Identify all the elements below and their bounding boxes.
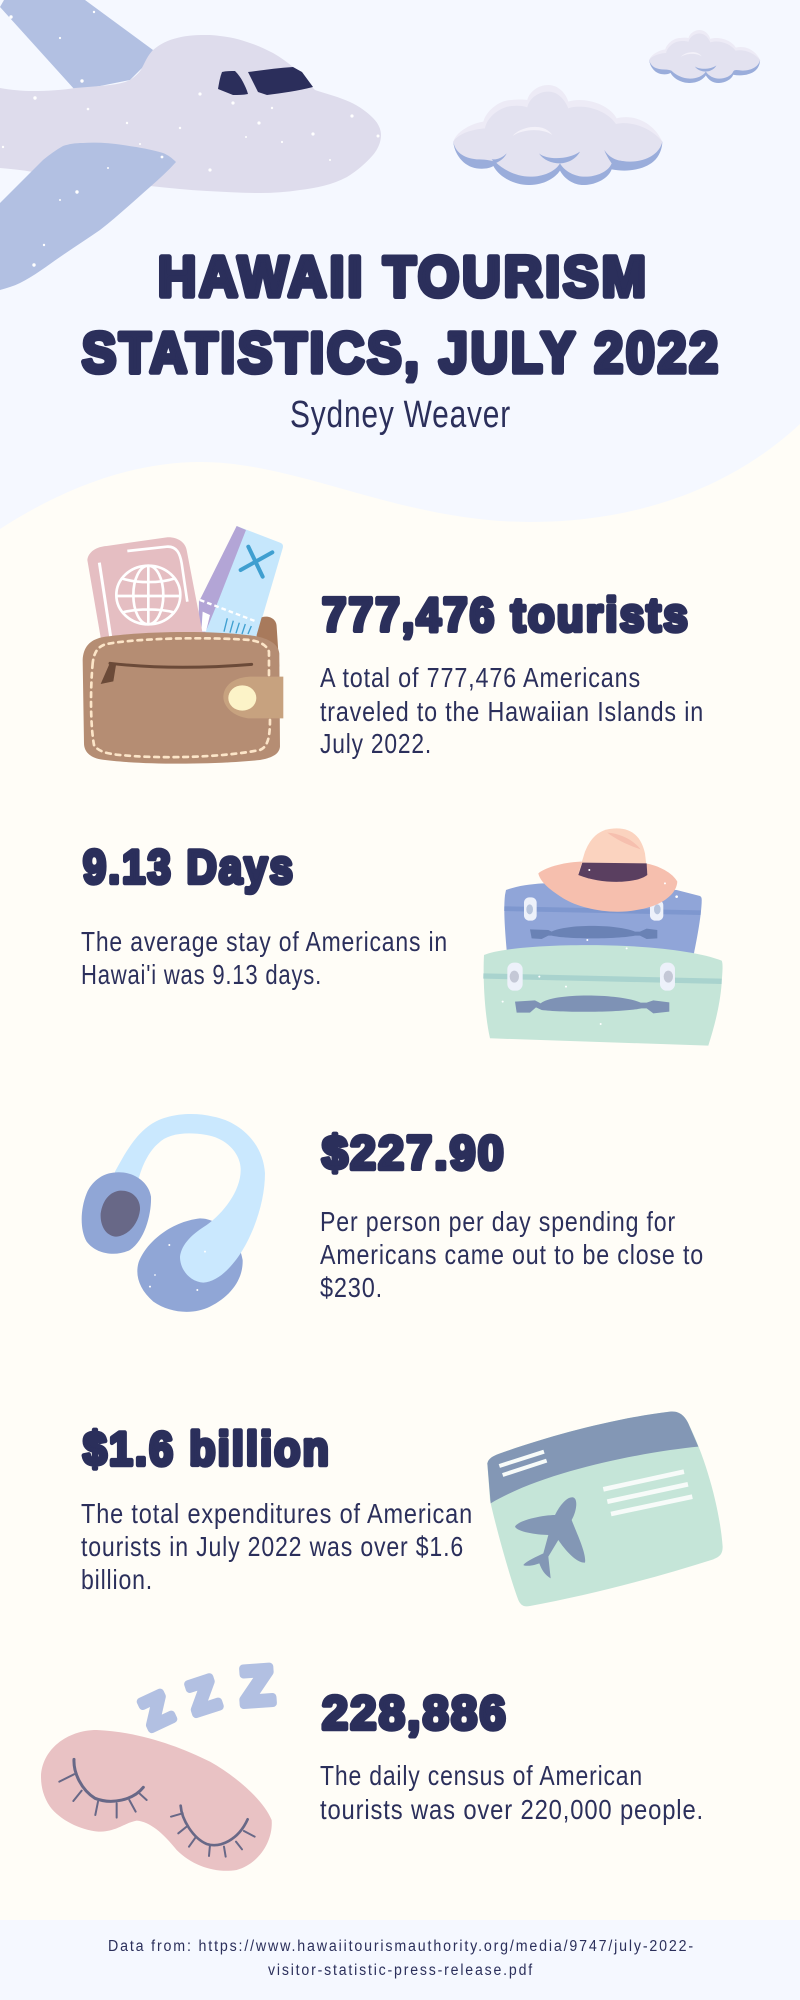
background: cream wave [0, 424, 800, 2000]
footer source text [108, 1938, 695, 1979]
text block: traveled to the Hawaiian Islands in [320, 696, 704, 727]
panel: tourists [83, 526, 704, 764]
icon: wallet with passport and ticket [83, 526, 283, 764]
text block: Americans came out to be close to [320, 1239, 704, 1270]
title [82, 245, 721, 385]
subtitle: author: Sydney Weaver [290, 394, 511, 436]
heading: 228,886 [322, 1686, 508, 1739]
heading: 777,476 tourists [322, 588, 690, 641]
text block: The total expenditures of American [81, 1498, 473, 1529]
text block: tourists was over 220,000 people. [320, 1794, 704, 1825]
text block: The daily census of American [320, 1760, 643, 1791]
icon: boarding pass [487, 1412, 723, 1606]
text block: Per person per day spending for [320, 1206, 676, 1237]
text block: tourists in July 2022 was over $1.6 [81, 1531, 464, 1562]
footer source text: visitor-statistic-press-release.pdf [268, 1962, 534, 1979]
title: STATISTICS, JULY 2022 [82, 321, 721, 385]
icon: zzz letters [135, 1656, 275, 1739]
footer source text: Data from: https://www.hawaiitourismauthority.org/media/9747/july-2022- [108, 1938, 695, 1955]
text block [81, 926, 448, 990]
text block: Hawai'i was 9.13 days. [81, 959, 322, 990]
icon: large cloud [453, 85, 662, 185]
heading: $1.6 billion [83, 1422, 331, 1475]
text block: billion. [81, 1564, 153, 1595]
title: HAWAII TOURISM [158, 245, 649, 309]
panel: days [81, 828, 723, 1046]
text block: The average stay of Americans in [81, 926, 448, 957]
icon: small cloud [649, 30, 760, 83]
footer band [0, 1920, 800, 2000]
icon: headphones [82, 1114, 265, 1312]
icon: zzz letters: Z [182, 1667, 224, 1724]
panel: daily census [41, 1656, 704, 1871]
text block: July 2022. [320, 728, 432, 759]
icon: suitcases with hat [483, 828, 723, 1046]
text block [320, 1760, 704, 1825]
text block [320, 1206, 704, 1303]
heading: 9.13 Days [83, 840, 295, 893]
heading: $227.90 [322, 1126, 506, 1179]
icon: sleep mask with zzz [41, 1656, 275, 1871]
icon: zzz letters: Z [239, 1656, 275, 1717]
icon: passport globe [116, 566, 180, 624]
panel: expenditures [81, 1412, 723, 1606]
text block: A total of 777,476 Americans [320, 662, 641, 693]
text block [81, 1498, 473, 1595]
icon: zzz letters: Z [135, 1684, 179, 1739]
icon: airplane [0, 0, 381, 290]
panel: spending [82, 1114, 704, 1312]
text block: $230. [320, 1272, 383, 1303]
text block [320, 662, 704, 759]
